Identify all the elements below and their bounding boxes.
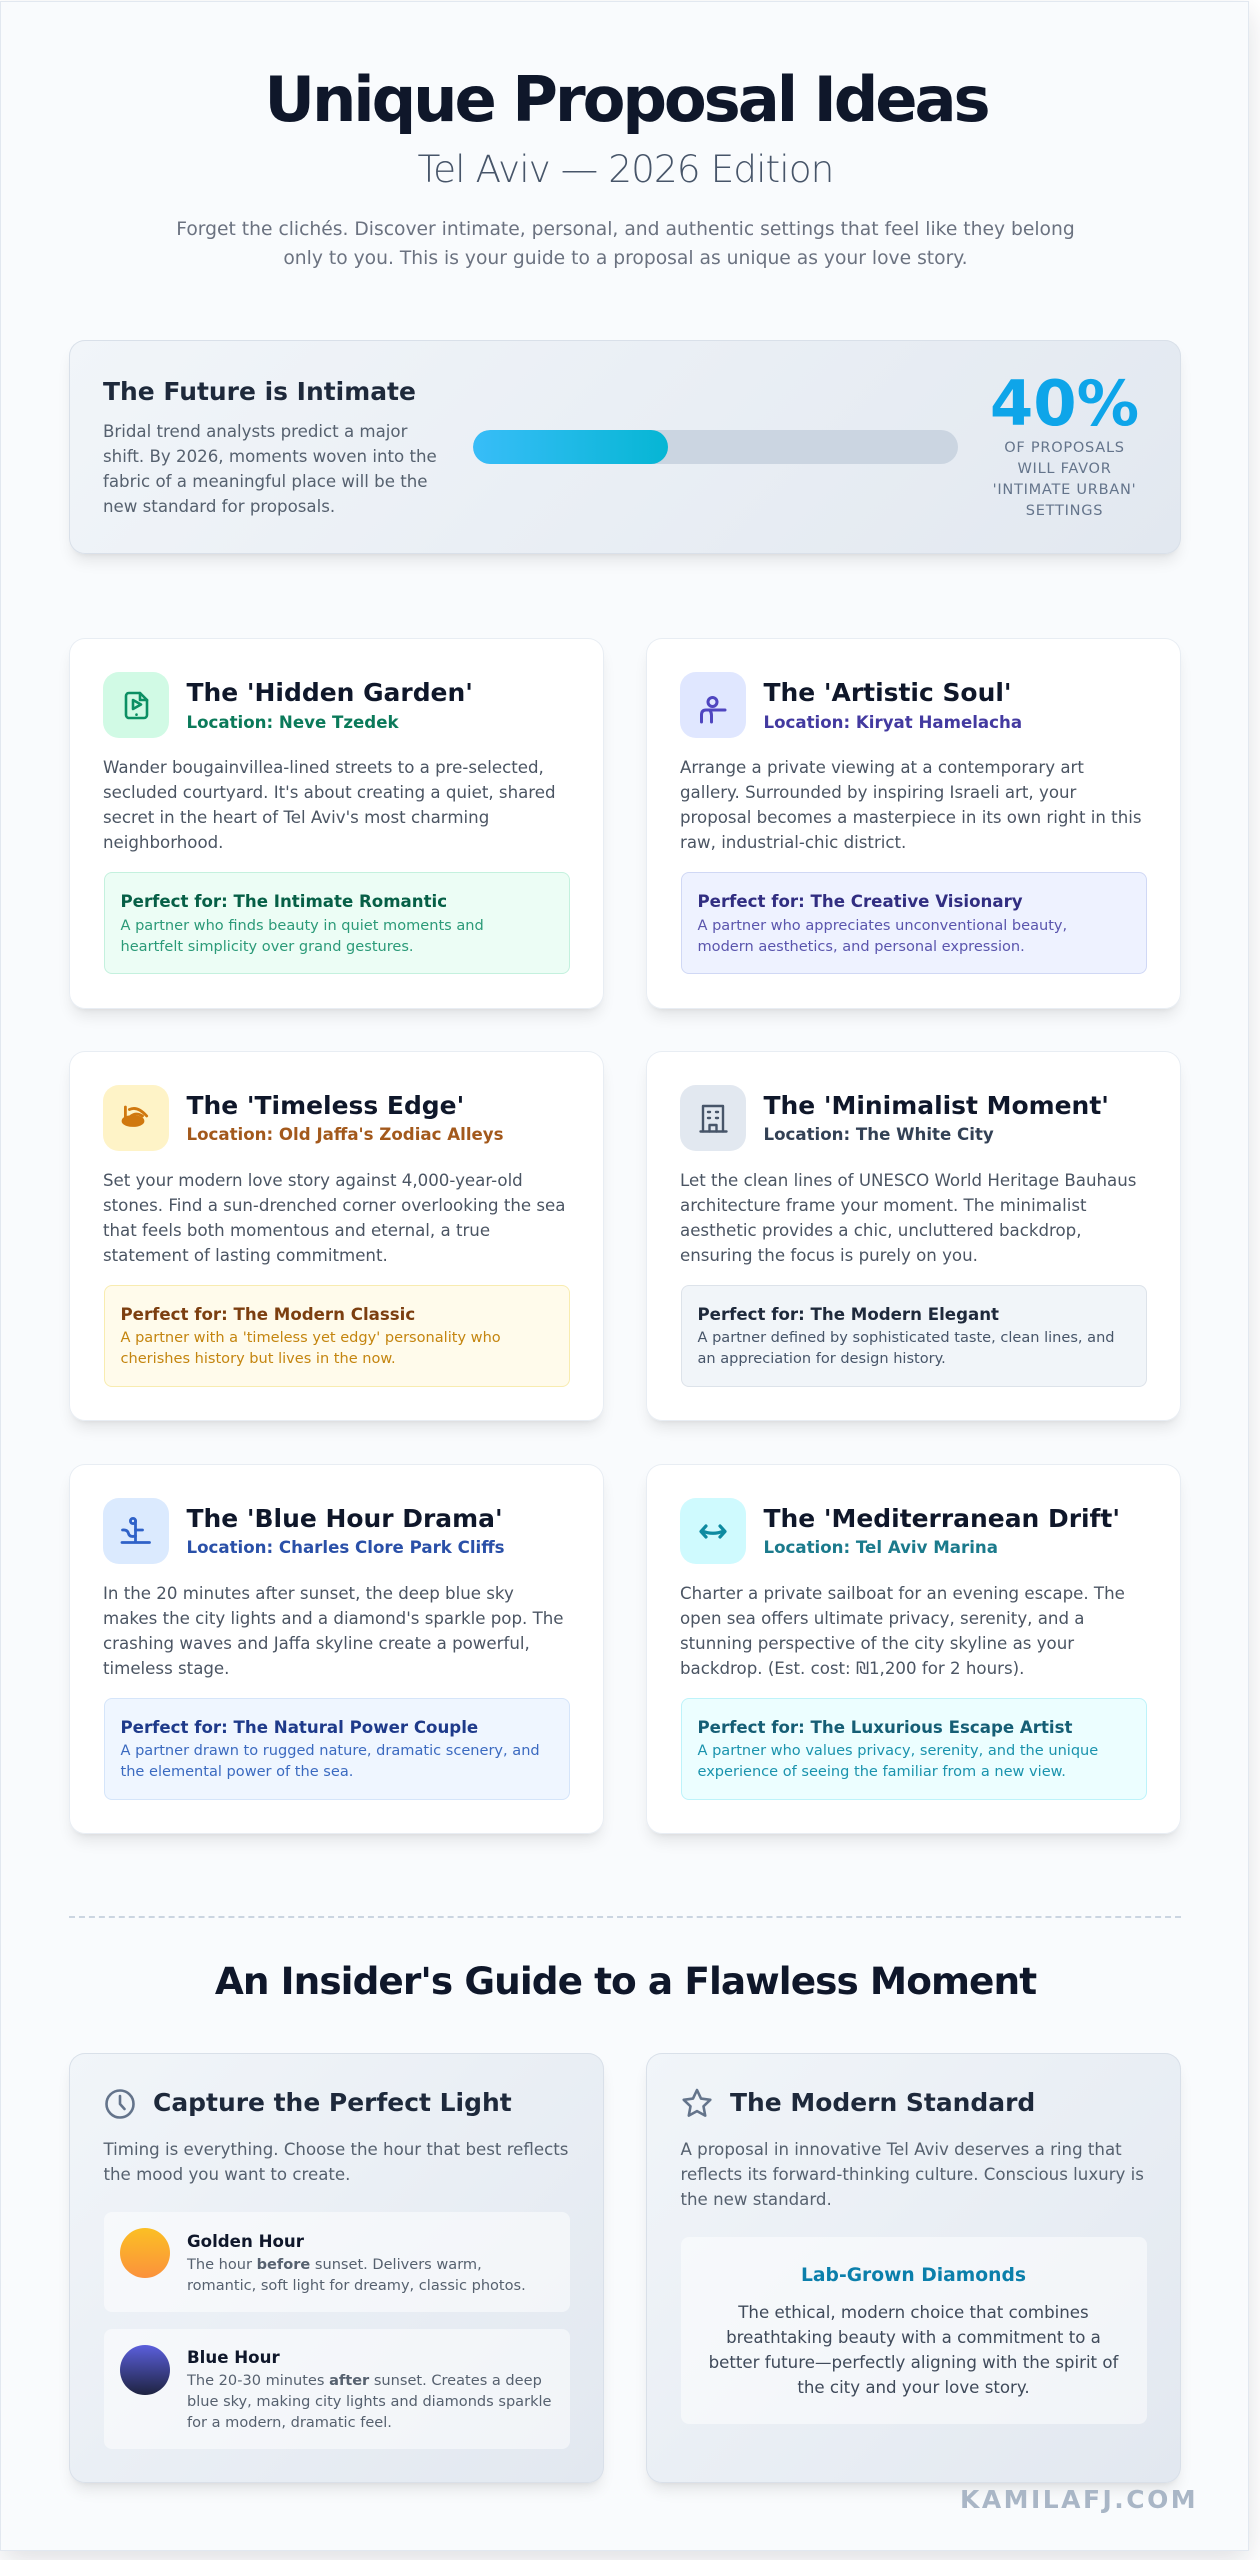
location: Location: Old Jaffa's Zodiac Alleys: [186, 1125, 504, 1144]
progress fill 40%: [473, 430, 668, 464]
perfect for text: A partner defined by sophisticated taste, clean lines, and: [698, 1329, 1115, 1346]
icon: two-way arrows: [680, 1498, 746, 1564]
description: Arrange a private viewing at a contemporary art: [680, 758, 1084, 777]
perfect for title: Perfect for: The Modern Classic: [120, 1305, 415, 1324]
perfect for text: [698, 917, 1067, 955]
perfect for text: [120, 1742, 540, 1780]
location: Location: Kiryat Hamelacha: [764, 712, 1022, 732]
description: [680, 758, 1142, 852]
perfect for title: Perfect for: The Intimate Romantic: [120, 892, 447, 911]
golden hour swatch: [120, 2228, 170, 2278]
perfect for text: A partner who finds beauty in quiet moments and: [120, 917, 484, 934]
card: artistic soul: [646, 638, 1180, 1008]
card title: The 'Minimalist Moment': [764, 1090, 1109, 1120]
panel: the modern standard: [646, 2053, 1181, 2483]
panel heading: The Future is Intimate: [103, 377, 416, 406]
description: raw, industrial-chic district.: [680, 833, 906, 852]
description: statement of lasting commitment.: [103, 1246, 388, 1264]
perfect for text: cherishes history but lives in the now.: [120, 1350, 396, 1367]
location: Location: Charles Clore Park Cliffs: [186, 1538, 505, 1557]
panel text: [680, 2140, 1144, 2209]
panel text: new standard for proposals.: [103, 497, 335, 516]
location: Location: Neve Tzedek: [186, 712, 399, 732]
description: aesthetic provides a chic, uncluttered backdrop,: [680, 1220, 1082, 1240]
golden hour text: romantic, soft light for dreamy, classic photos.: [187, 2276, 526, 2294]
description: Wander bougainvillea-lined streets to a pre-selected,: [103, 758, 544, 777]
perfect for text: A partner who appreciates unconventional beauty,: [698, 917, 1067, 934]
icon: garden document: [103, 672, 169, 738]
panel heading: Capture the Perfect Light: [153, 2088, 512, 2117]
lab-grown diamonds block: [680, 2237, 1146, 2424]
description: secret in the heart of Tel Aviv's most charming: [103, 808, 489, 827]
perfect for title: Perfect for: The Creative Visionary: [698, 892, 1023, 911]
description: secluded courtyard. It's about creating a quiet, shared: [103, 783, 556, 802]
blue hour title: Blue Hour: [187, 2348, 280, 2367]
panel heading: The Modern Standard: [730, 2088, 1035, 2117]
golden hour title: Golden Hour: [187, 2232, 304, 2251]
perfect for box: [680, 872, 1146, 974]
intro text: only to you. This is your guide to a proposal as unique as your love story.: [283, 248, 968, 268]
statistic caption: WILL FAVOR: [1017, 460, 1112, 477]
icon: clock: [105, 2089, 135, 2119]
description: gallery. Surrounded by inspiring Israeli art, your: [680, 783, 1076, 802]
description: [680, 1170, 1136, 1264]
description: that feels both momentous and eternal, a true: [103, 1220, 490, 1240]
description: [103, 1584, 563, 1678]
description: proposal becomes a masterpiece in its own right in this: [680, 808, 1142, 827]
perfect for text: A partner who values privacy, serenity, and the unique: [698, 1742, 1098, 1759]
blue hour text: blue sky, making city lights and diamonds sparkle: [187, 2393, 552, 2410]
description: Charter a private sailboat for an evening escape. The: [680, 1584, 1125, 1602]
panel: the future is intimate: [69, 340, 1181, 554]
block text: The ethical, modern choice that combines: [738, 2302, 1089, 2322]
perfect for title: Perfect for: The Luxurious Escape Artist: [698, 1718, 1072, 1737]
block text: breathtaking beauty with a commitment to a: [726, 2328, 1101, 2346]
panel text: reflects its forward-thinking culture. Conscious luxury is: [680, 2165, 1144, 2184]
progress bar: [473, 430, 958, 464]
description: backdrop. (Est. cost: ₪1,200 for 2 hours).: [680, 1658, 1024, 1678]
statistic caption: [993, 439, 1136, 519]
perfect for text: experience of seeing the familiar from a new view.: [698, 1763, 1066, 1780]
perfect for text: the elemental power of the sea.: [120, 1763, 353, 1780]
card: blue hour drama: [69, 1464, 604, 1834]
description: makes the city lights and a diamond's sparkle pop. The: [103, 1608, 563, 1628]
location: Location: The White City: [764, 1125, 994, 1144]
icon: star: [682, 2088, 712, 2117]
panel text: [103, 422, 437, 516]
panel text: A proposal in innovative Tel Aviv deserves a ring that: [680, 2140, 1122, 2159]
card title: The 'Mediterranean Drift': [764, 1504, 1120, 1532]
panel text: [103, 2140, 568, 2184]
blue hour text: for a modern, dramatic feel.: [187, 2414, 392, 2431]
intro text: Forget the clichés. Discover intimate, personal, and authentic settings that feel like they belong: [176, 218, 1075, 240]
perfect for text: [120, 1329, 501, 1367]
panel text: Bridal trend analysts predict a major: [103, 422, 407, 441]
icon: building: [680, 1084, 746, 1150]
block heading: Lab-Grown Diamonds: [801, 2265, 1026, 2286]
description: open sea offers ultimate privacy, serenity, and a: [680, 1608, 1084, 1628]
perfect for box: [104, 1698, 570, 1800]
perfect for box: [680, 1698, 1146, 1800]
description: Let the clean lines of UNESCO World Heritage Bauhaus: [680, 1170, 1136, 1190]
description: [103, 1170, 565, 1264]
blue hour block: [104, 2329, 570, 2449]
icon: cliff and waves: [103, 1498, 169, 1564]
panel text: shift. By 2026, moments woven into the: [103, 447, 437, 466]
blue hour text: [186, 2372, 552, 2431]
card: minimalist moment: [646, 1050, 1180, 1421]
panel text: Timing is everything. Choose the hour that best reflects: [104, 2140, 568, 2159]
watermark: KAMILAFJ.COM: [960, 2485, 1198, 2514]
intro text: [176, 218, 1075, 268]
title: Unique Proposal Ideas: [264, 63, 988, 136]
card: hidden garden: [69, 638, 604, 1008]
perfect for text: [698, 1329, 1115, 1367]
panel text: fabric of a meaningful place will be the: [103, 472, 428, 491]
description: stunning perspective of the city skyline as your: [680, 1634, 1074, 1652]
perfect for title: Perfect for: The Modern Elegant: [698, 1305, 999, 1324]
perfect for title: Perfect for: The Natural Power Couple: [120, 1718, 478, 1737]
perfect for text: [698, 1742, 1098, 1780]
description: In the 20 minutes after sunset, the deep blue sky: [103, 1584, 514, 1602]
card title: The 'Timeless Edge': [186, 1090, 464, 1120]
description: ensuring the focus is purely on you.: [680, 1246, 978, 1264]
icon: ancient stone: [103, 1084, 169, 1150]
statistic caption: 'INTIMATE URBAN': [993, 481, 1136, 498]
card title: The 'Artistic Soul': [764, 678, 1012, 707]
statistic caption: OF PROPOSALS: [1004, 439, 1125, 456]
description: crashing waves and Jaffa skyline create a powerful,: [103, 1634, 530, 1652]
golden hour text: The hour before sunset. Delivers warm,: [187, 2256, 482, 2272]
perfect for text: modern aesthetics, and personal expression.: [698, 938, 1025, 955]
blue hour text: The 20-30 minutes after sunset. Creates a deep: [187, 2372, 542, 2389]
section heading: An Insider's Guide to a Flawless Moment: [215, 1959, 1036, 2003]
perfect for box: [104, 1285, 570, 1387]
block text: better future—perfectly aligning with the spirit of: [709, 2352, 1118, 2372]
block text: [709, 2302, 1119, 2396]
description: [680, 1584, 1125, 1678]
description: [103, 758, 556, 852]
perfect for text: heartfelt simplicity over grand gestures.: [120, 938, 414, 955]
card: timeless edge: [69, 1050, 604, 1421]
description: timeless stage.: [103, 1658, 229, 1678]
statistic caption: SETTINGS: [1026, 502, 1103, 519]
description: Set your modern love story against 4,000-year-old: [103, 1170, 523, 1190]
blue hour swatch: [120, 2345, 170, 2395]
perfect for box: [104, 872, 570, 974]
perfect for box: [680, 1285, 1146, 1387]
card title: The 'Hidden Garden': [186, 678, 473, 707]
block text: the city and your love story.: [797, 2378, 1030, 2396]
location: Location: Tel Aviv Marina: [764, 1538, 998, 1557]
perfect for text: an appreciation for design history.: [698, 1350, 946, 1367]
card title: The 'Blue Hour Drama': [186, 1504, 503, 1532]
description: stones. Find a sun-drenched corner overlooking the sea: [103, 1196, 565, 1214]
panel text: the new standard.: [680, 2190, 832, 2209]
icon: seated figure: [680, 672, 746, 738]
perfect for text: A partner drawn to rugged nature, dramatic scenery, and: [120, 1742, 540, 1759]
perfect for text: A partner with a 'timeless yet edgy' personality who: [120, 1329, 501, 1346]
panel: capture the perfect light: [69, 2053, 604, 2483]
description: neighborhood.: [103, 833, 223, 852]
subtitle: Tel Aviv — 2026 Edition: [418, 147, 833, 191]
panel text: the mood you want to create.: [104, 2165, 350, 2184]
golden hour block: [104, 2212, 570, 2312]
perfect for text: [120, 917, 484, 955]
description: architecture frame your moment. The minimalist: [680, 1196, 1087, 1214]
card: mediterranean drift: [646, 1464, 1180, 1834]
golden hour text: [186, 2256, 526, 2294]
statistic 40%: 40%: [990, 367, 1139, 440]
